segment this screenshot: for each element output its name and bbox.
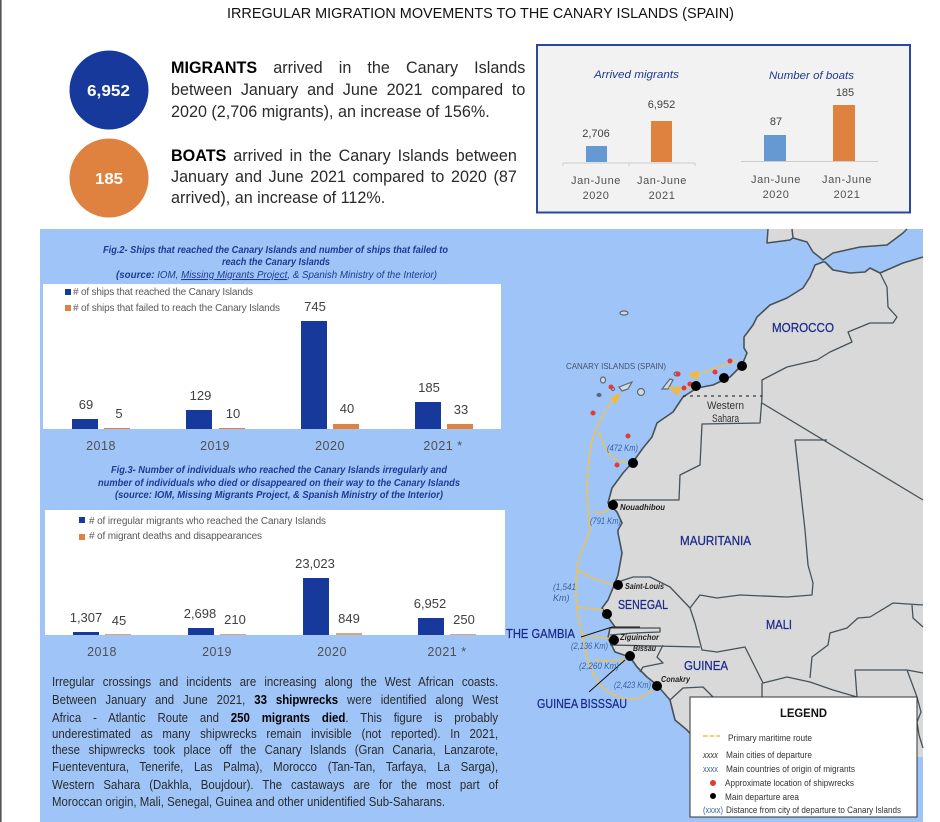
year axis: ships: 2021 * [423, 439, 463, 453]
map labels: (2,423 Km) [614, 680, 651, 690]
legend: Main cities of departure [726, 750, 812, 760]
year axis: individuals [87, 645, 467, 659]
map labels: Conakry [661, 675, 690, 684]
text block: shipwrecks narrative: Moroccan origin, Mali, Senegal, Guinea and other unidentified Sub-Saharans. [52, 794, 445, 809]
text block: shipwrecks narrative: these shipwrecks took place off the Canary Islands (Gran Canaria, Lanzarote, [52, 742, 498, 757]
heading: figure 2: Fig.2- Ships that reached the Canary Islands and number of ships that failed to [103, 244, 449, 256]
text block: shipwrecks narrative [52, 674, 498, 809]
heading: figure 3: (source: IOM, Missing Migrants Project, & Spanish Ministry of the Interior) [115, 489, 443, 501]
map labels: (472 Km) [607, 443, 638, 453]
year axis: individuals: 2018 [87, 645, 117, 659]
legend: (xxxx) [703, 805, 723, 815]
map of West Africa [506, 229, 923, 817]
bar values: ships: 40 [340, 401, 354, 416]
chart: number of boats: Jan-June [751, 174, 801, 186]
chart legend: ships: # of ships that reached the Canary Islands [73, 287, 253, 298]
text block: migrants [171, 58, 525, 121]
bars: failed ships [104, 424, 473, 429]
chart: number of boats: 87 [770, 116, 782, 128]
year axis: ships [86, 439, 463, 453]
legend: Main countries of origin of migrants [726, 764, 855, 774]
chart: number of boats: Number of boats [769, 70, 855, 82]
bar values: ships: 69 [79, 397, 93, 412]
text block: shipwrecks narrative: Between January and June 2021, 33 shipwrecks were identified along West [52, 692, 498, 707]
map labels: (2,136 Km) [571, 641, 608, 651]
text block: shipwrecks narrative: Africa - Atlantic Route and 250 migrants died. This figure is probably [52, 710, 498, 725]
heading: figure 2: reach the Canary Islands [222, 256, 330, 268]
chart legend: individuals: # of migrant deaths and disappearances [89, 531, 262, 542]
bar values: individuals: 210 [224, 612, 246, 627]
bar values: ships: 33 [454, 402, 468, 417]
chart: arrived migrants: 2020 [583, 190, 609, 202]
chart: number of boats: 2021 [834, 189, 860, 201]
route arrowheads [610, 370, 698, 404]
main departure areas [602, 361, 747, 691]
map labels: MAURITANIA [680, 533, 751, 548]
text block: boats: BOATS arrived in the Canary Islands between [171, 146, 517, 165]
heading: figure 3: number of individuals who died or disappeared on their way to the Canary Islands [98, 477, 460, 489]
text block: shipwrecks narrative: Fuenteventura, Tenerife, Las Palma), Morocco (Tan-Tan, Tarfaya, La Sarga), [52, 759, 498, 774]
bars: migrants [73, 578, 444, 635]
text block: migrants: MIGRANTS arrived in the Canary Islands [171, 58, 525, 77]
legend: Primary maritime route [728, 733, 812, 743]
map labels: Km) [553, 593, 570, 603]
bar values: individuals: 849 [338, 611, 360, 626]
text block: boats: arrived), an increase of 112%. [171, 188, 385, 207]
bars: ships [72, 321, 441, 429]
map labels: Nouadhibou [620, 503, 665, 512]
chart: arrived migrants: Arrived migrants [593, 69, 680, 81]
panel: sea background [40, 229, 923, 822]
chart: number of boats [741, 70, 878, 201]
heading: figure 3: Fig.3- Number of individuals who reached the Canary Islands irregularly and [111, 464, 448, 476]
bar values: individuals: 2,698 [184, 606, 216, 621]
chart: arrived migrants: Jan-June [571, 175, 621, 187]
legend [690, 697, 917, 817]
canary islands [597, 311, 680, 396]
text block: migrants: 2020 (2,706 migrants), an increase of 156%. [171, 102, 490, 121]
legend: Main departure area [725, 792, 799, 802]
map labels: Bissau [633, 644, 656, 653]
icon: migrants circle [70, 50, 148, 130]
heading: figure 2: (source: IOM, Missing Migrants Project, & Spanish Ministry of the Interior) [116, 269, 437, 281]
bar values: ships: 5 [115, 406, 123, 421]
legend: xxxx [703, 764, 718, 774]
chart: number of boats: Jan-June [822, 174, 872, 186]
shipwreck locations [590, 358, 732, 468]
chart: arrived migrants [563, 69, 695, 202]
year axis: individuals: 2021 * [427, 645, 467, 659]
year axis: ships: 2020 [315, 439, 345, 453]
title: IRREGULAR MIGRATION MOVEMENTS TO THE CANARY ISLANDS (SPAIN) [227, 5, 734, 22]
chart: ships by year [43, 284, 501, 453]
bar values: ships [79, 299, 468, 421]
chart legend: ships: # of ships that failed to reach the Canary Islands [73, 303, 280, 314]
chart: number of boats: 2020 [763, 189, 789, 201]
chart legend: individuals: # of irregular migrants who reached the Canary Islands [89, 516, 326, 527]
chart: arrived migrants: 2021 [649, 190, 675, 202]
bar values: individuals: 23,023 [295, 556, 335, 571]
map labels: (2,260 Km) [579, 661, 619, 671]
bar values: individuals: 45 [112, 613, 126, 628]
legend: Approximate location of shipwrecks [725, 778, 854, 788]
text block: shipwrecks narrative: Irregular crossings and incidents are increasing along the West African coasts. [52, 674, 498, 689]
map labels: Ziguinchor [619, 633, 660, 642]
bars: deaths [105, 633, 476, 635]
map labels: Sahara [712, 413, 740, 425]
chart: arrived migrants: 6,952 [648, 99, 675, 111]
primary maritime routes [576, 360, 737, 699]
map labels: GUINEA [684, 658, 728, 673]
bar values: individuals: 1,307 [70, 610, 102, 625]
map labels [506, 320, 834, 711]
map labels: Saint-Louis [625, 582, 664, 591]
chart: number of boats: 185 [836, 87, 854, 99]
bar values: ships: 129 [190, 388, 211, 403]
icon: boats circle [70, 138, 148, 218]
panel: summary bar charts [537, 45, 910, 212]
map labels: CANARY ISLANDS (SPAIN) [566, 361, 666, 371]
text block: shipwrecks narrative: Western Sahara (Dakhla, Boujdour). The castaways are for the most part of [52, 777, 498, 792]
map labels: SENEGAL [618, 597, 668, 612]
bar values: individuals: 250 [453, 612, 475, 627]
icon: boats circle: 185 [95, 171, 123, 188]
map labels: (791 Km) [590, 516, 621, 526]
map labels: MOROCCO [772, 320, 834, 335]
chart: arrived migrants: 2,706 [582, 128, 610, 140]
chart legend: individuals [79, 516, 326, 542]
map labels: MALI [766, 617, 792, 632]
text block: shipwrecks narrative: underestimated as many shipwrecks remain invisible (not reported). In 2021, [52, 726, 498, 741]
map labels: Western [707, 400, 744, 412]
text block: migrants: between January and June 2021 compared to [171, 80, 525, 99]
bar values: ships: 10 [226, 406, 240, 421]
bar values: ships: 745 [304, 299, 326, 314]
chart legend: ships [65, 287, 280, 314]
legend: xxxx [702, 750, 718, 760]
legend: Distance from city of departure to Canary Islands [726, 805, 901, 815]
heading: figure 2 [103, 244, 449, 281]
bar values: individuals [70, 556, 475, 628]
legend: LEGEND [780, 706, 827, 720]
year axis: ships: 2019 [200, 439, 230, 453]
chart: arrived migrants: Jan-June [637, 175, 687, 187]
map labels: THE GAMBIA [506, 626, 575, 641]
year axis: ships: 2018 [86, 439, 116, 453]
text block: boats [171, 146, 517, 207]
year axis: individuals: 2020 [317, 645, 347, 659]
heading: figure 3 [98, 464, 460, 501]
bar values: individuals: 6,952 [414, 596, 446, 611]
bar values: ships: 185 [418, 380, 440, 395]
map labels: GUINEA BISSSAU [537, 696, 627, 711]
map labels: (1,541 [553, 582, 576, 592]
icon: migrants circle: 6,952 [87, 83, 130, 100]
chart: individuals by year [45, 510, 505, 659]
text block: boats: January and June 2021 compared to 2020 (87 [171, 167, 517, 186]
year axis: individuals: 2019 [202, 645, 232, 659]
